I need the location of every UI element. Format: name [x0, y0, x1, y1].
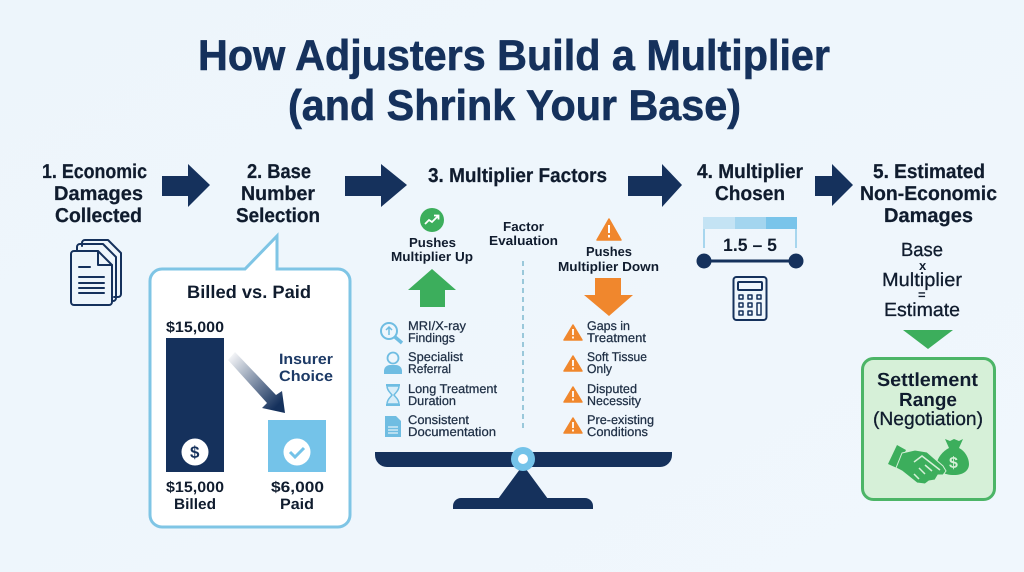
step 2 heading: Selection: [236, 205, 320, 227]
icon: calculator: [734, 277, 766, 320]
factor: specialist: Specialist: [408, 350, 464, 364]
factor: gaps: Treatment: [587, 331, 647, 345]
formula: [882, 240, 963, 321]
bar: billed: $: [190, 443, 200, 462]
label: insurer choice: Choice: [279, 368, 333, 385]
down heading: [558, 244, 659, 274]
factor: specialist: [408, 350, 464, 376]
icon: magnifier: [381, 323, 402, 343]
arrow: step 4 to 5: [815, 164, 853, 206]
multiplier range gauge: 1.5 – 5: [723, 235, 777, 255]
arrow: step 3 to 4: [628, 164, 682, 207]
settlement heading: Settlement: [877, 370, 979, 391]
arrow: insurer choice: [228, 352, 285, 413]
icon: handshake and money bag: $: [949, 455, 958, 472]
factor: gaps: [564, 319, 647, 345]
step 5 heading: 5. Estimated: [873, 161, 985, 183]
title: [198, 32, 830, 130]
bar: paid: [268, 420, 326, 513]
factor: pre-existing: Conditions: [587, 425, 648, 439]
bar: billed: $15,000: [166, 319, 224, 336]
factor: pre-existing: [564, 413, 654, 439]
factor: specialist: Referral: [408, 362, 451, 376]
icon: hourglass: [386, 385, 400, 405]
bar: paid: Paid: [280, 496, 314, 513]
factor: soft tissue: [564, 350, 647, 376]
factor: mri: [408, 319, 467, 345]
bar: billed: Billed: [174, 496, 216, 513]
settlement heading: [873, 370, 983, 430]
factor: documentation: [408, 413, 496, 439]
panel: pushes multiplier down: [558, 219, 659, 439]
factor: documentation: Consistent: [408, 413, 470, 427]
arrow: step 2 to 3: [345, 164, 407, 207]
multiplier range gauge: [696, 217, 804, 268]
icon: warning: [597, 219, 621, 240]
formula: x: [919, 258, 927, 273]
factor: pre-existing: Pre-existing: [587, 413, 654, 427]
arrow: step 1 to 2: [162, 164, 210, 207]
icon: trend up: [420, 208, 444, 232]
bar: billed: [166, 319, 224, 513]
step 4 heading: Chosen: [715, 183, 785, 205]
title: How Adjusters Build a Multiplier: [198, 32, 830, 80]
title: (and Shrink Your Base): [288, 82, 741, 130]
up heading: Multiplier Up: [391, 249, 473, 264]
step 2 heading: Number: [241, 183, 315, 205]
factor evaluation label: [489, 219, 558, 248]
factor evaluation label: Factor: [503, 219, 544, 234]
callout heading: Billed vs. Paid: [187, 282, 311, 302]
bar: billed: $15,000: [166, 479, 224, 496]
factor: soft tissue: Soft Tissue: [587, 350, 647, 364]
label: insurer choice: [279, 351, 333, 385]
step 5 heading: [860, 161, 997, 227]
factor: long treatment: Duration: [408, 394, 456, 408]
icon: document: [385, 416, 401, 437]
factor: documentation: Documentation: [408, 425, 496, 439]
arrow: down: [584, 278, 633, 316]
step 4 heading: 4. Multiplier: [697, 161, 803, 183]
settlement heading: Range: [899, 390, 957, 411]
step 5 heading: Damages: [884, 205, 973, 227]
down heading: Pushes: [586, 244, 632, 259]
up heading: [391, 235, 473, 264]
panel: billed vs paid callout: [150, 236, 350, 527]
icon: doctor: [384, 352, 402, 374]
formula: =: [918, 287, 926, 302]
factor: disputed: Necessity: [587, 394, 642, 408]
step 2 heading: [236, 161, 320, 227]
step 1 heading: [42, 161, 147, 227]
panel: pushes multiplier up: [381, 208, 498, 439]
step 2 heading: 2. Base: [247, 161, 311, 183]
balance scale: [375, 447, 672, 509]
formula: Base: [901, 240, 943, 261]
factor: disputed: Disputed: [587, 382, 637, 396]
factor evaluation label: Evaluation: [489, 233, 558, 248]
label: insurer choice: Insurer: [279, 351, 333, 368]
factor: long treatment: Long Treatment: [408, 382, 498, 396]
factor: mri: MRI/X-ray: [408, 319, 467, 333]
factor: disputed: [564, 382, 642, 408]
icon: handshake and money bag: [888, 439, 969, 484]
factor: mri: Findings: [408, 331, 455, 345]
step 3 heading: 3. Multiplier Factors: [428, 165, 607, 187]
arrow: down to settlement: [903, 330, 953, 349]
arrow: up: [408, 269, 456, 307]
factor: long treatment: [408, 382, 498, 408]
icon: document stack: [71, 240, 121, 305]
bar: paid: $6,000: [271, 479, 324, 496]
formula: Estimate: [884, 300, 960, 321]
step 4 heading: [697, 161, 803, 205]
step 5 heading: Non-Economic: [860, 183, 997, 205]
formula: Multiplier: [882, 270, 963, 291]
factor: gaps: Gaps in: [587, 319, 630, 333]
settlement heading: (Negotiation): [873, 409, 983, 430]
step 1 heading: Damages: [54, 183, 143, 205]
factor: soft tissue: Only: [587, 362, 613, 376]
step 1 heading: 1. Economic: [42, 161, 147, 183]
up heading: Pushes: [409, 235, 456, 250]
panel: settlement range: [862, 358, 994, 500]
step 1 heading: Collected: [55, 205, 142, 227]
down heading: Multiplier Down: [558, 259, 659, 274]
